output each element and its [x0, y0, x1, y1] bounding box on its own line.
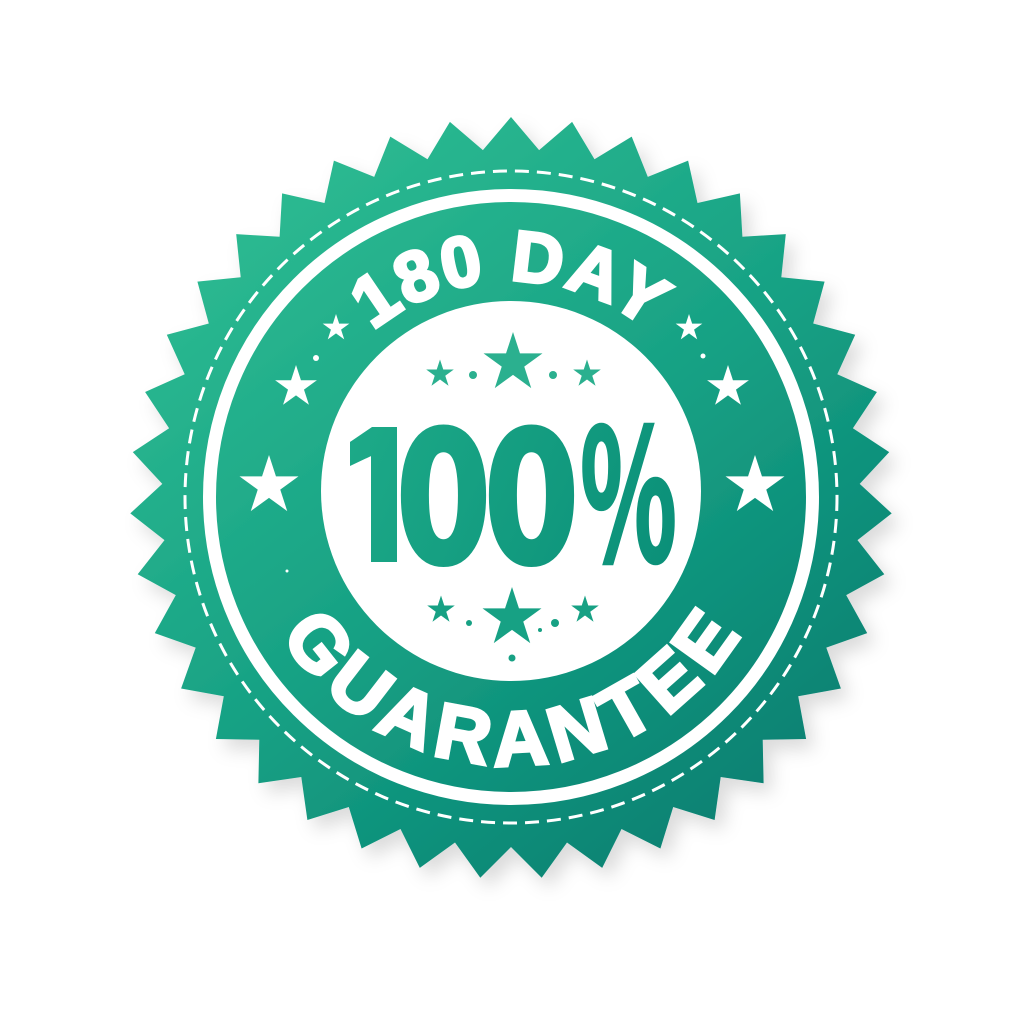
- sunburst seal edge: [130, 117, 892, 878]
- center white disc: [321, 301, 701, 681]
- stars: lower center group: [427, 587, 599, 662]
- main figure: 100%: 0: [485, 352, 578, 614]
- main figure: 100%: 1: [336, 352, 412, 614]
- main figure: 100%: [350, 422, 675, 567]
- stars: white ring stars: [240, 314, 784, 572]
- white ring: [210, 196, 812, 798]
- dashed stitch ring: [185, 171, 837, 823]
- curved heading: GUARANTEE: GUARANTEE: [289, 606, 742, 768]
- badge: [130, 117, 899, 888]
- main figure: 100%: 0: [397, 352, 490, 614]
- main figure: 100%: %: [580, 352, 677, 614]
- curved heading: 180 DAY: 180 DAY: [352, 230, 677, 330]
- stars: upper center group: [426, 332, 601, 388]
